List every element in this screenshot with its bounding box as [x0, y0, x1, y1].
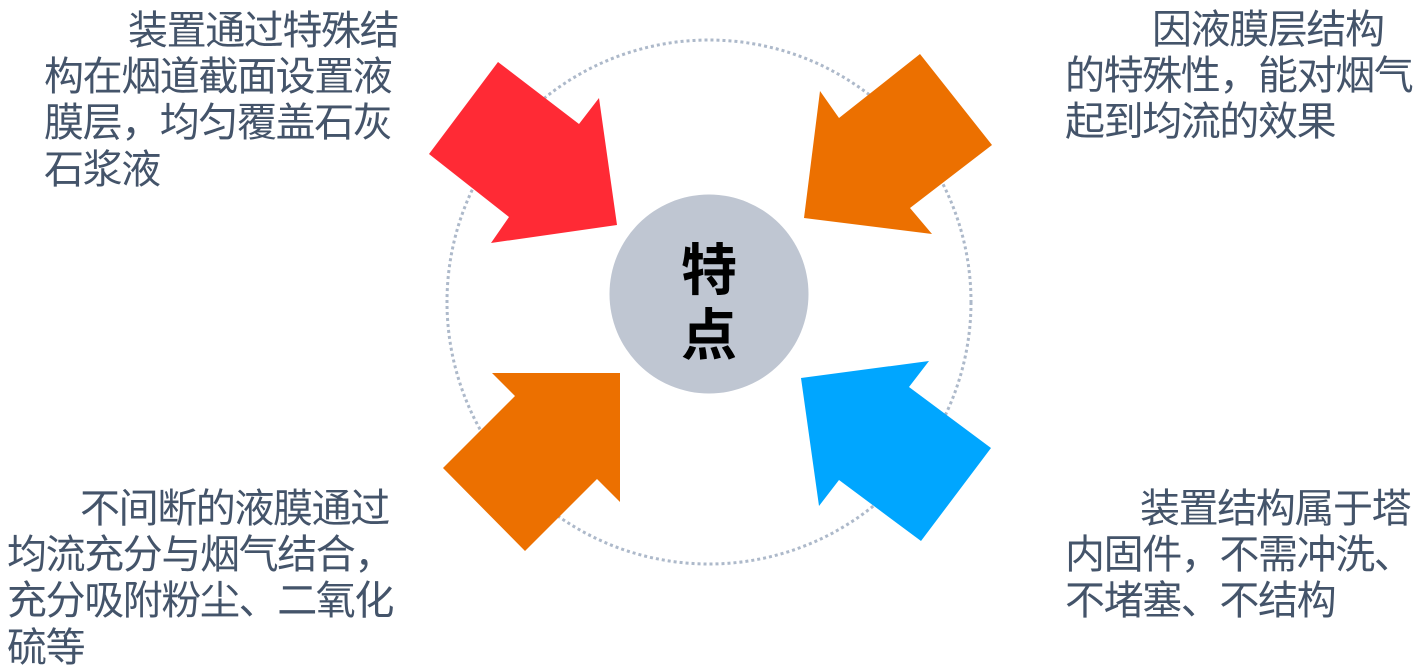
text block: bottom left: [7, 487, 393, 670]
arrow: top left red: [429, 62, 617, 243]
text block: bottom right: 不堵塞、不结构: [1065, 579, 1335, 623]
text block: top right: [1065, 8, 1412, 144]
text block: bottom right: 内固件，不需冲洗、: [1065, 533, 1412, 577]
center label: [681, 239, 737, 367]
arrow: bottom right blue: [801, 361, 991, 541]
arrow: top right orange: [804, 54, 992, 234]
text block: top left: 石浆液: [44, 148, 160, 192]
text block: top right: 起到均流的效果: [1065, 100, 1335, 144]
center label: 特: [681, 239, 737, 302]
text block: top left: 装置通过特殊结: [128, 9, 398, 53]
text block: top right: 因液膜层结构: [1152, 8, 1384, 52]
text block: bottom right: [1065, 487, 1412, 623]
text block: bottom left: 均流充分与烟气结合，: [7, 533, 393, 577]
arrow: bottom left orange: [443, 373, 620, 551]
text block: bottom right: 装置结构属于塔: [1140, 487, 1410, 531]
text block: top right: 的特殊性，能对烟气: [1065, 54, 1412, 98]
text block: top left: 构在烟道截面设置液: [44, 55, 391, 99]
text block: bottom left: 不间断的液膜通过: [80, 487, 389, 531]
text block: top left: 膜层，均匀覆盖石灰: [44, 101, 391, 145]
center label: 点: [681, 304, 737, 367]
center circle: [610, 194, 808, 394]
text block: top left: [44, 9, 398, 192]
text block: bottom left: 硫等: [7, 626, 84, 670]
dotted ring: [447, 40, 971, 564]
text block: bottom left: 充分吸附粉尘、二氧化: [7, 579, 393, 623]
